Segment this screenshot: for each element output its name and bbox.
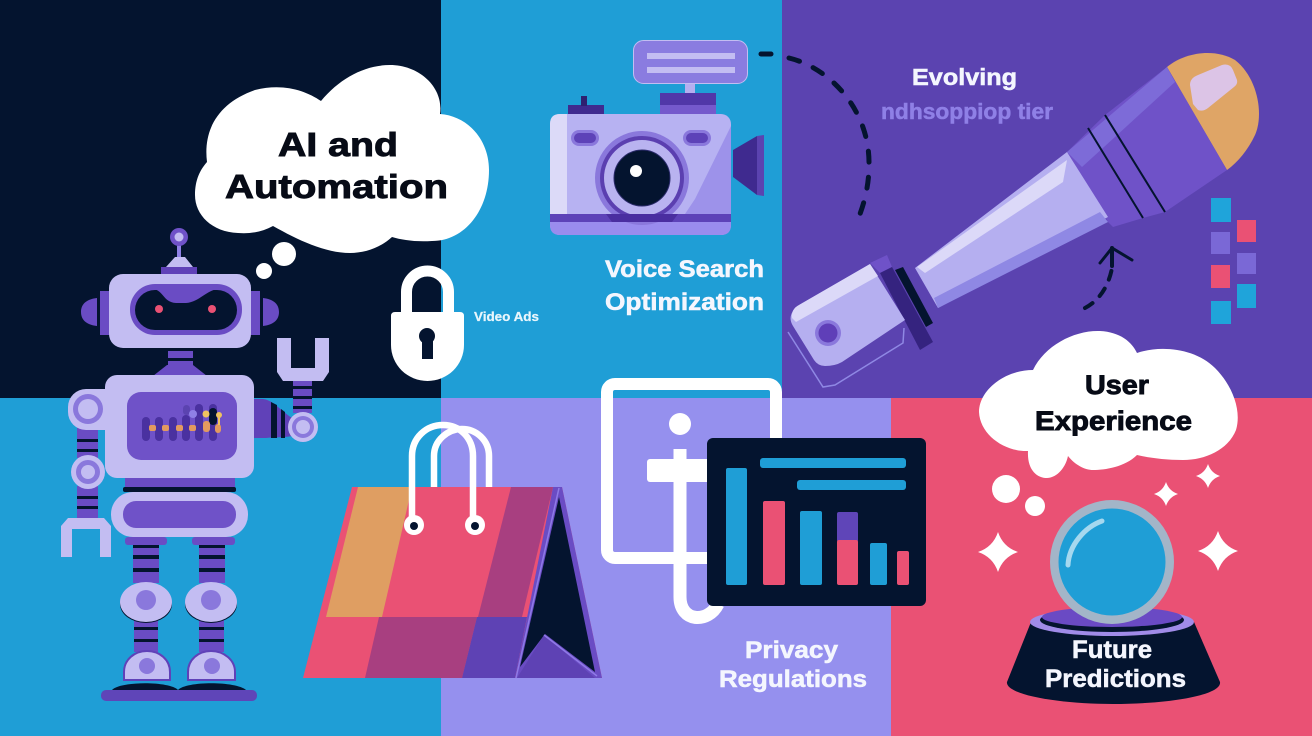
- label: Voice Search Optimization: [605, 256, 764, 316]
- robot antenna: [161, 228, 197, 274]
- icon: robot: [61, 228, 329, 701]
- robot neck: [153, 351, 207, 376]
- robot left leg: [112, 537, 178, 690]
- icon: crystal ball on pedestal: [1007, 500, 1220, 704]
- arrow: dashed curve from speech box: [761, 54, 869, 224]
- telescope orange cap: [1167, 53, 1259, 170]
- telescope front barrel: [1067, 67, 1227, 227]
- panel: pink bottom-right background: [891, 398, 1312, 736]
- crystal ball: [1050, 500, 1174, 624]
- telescope eyepiece handle: [791, 264, 905, 366]
- bag back handle: [434, 429, 489, 488]
- robot head: [81, 274, 279, 348]
- camera lens: [595, 131, 689, 225]
- callout: User Experience cloud: Experience: [1035, 406, 1192, 436]
- robot chest equalizer: [142, 404, 222, 441]
- heading: Evolving: Evolving: [912, 64, 1017, 90]
- label: Privacy Regulations: [719, 637, 867, 693]
- label: Privacy Regulations: Privacy: [745, 637, 839, 664]
- bag side gusset: [515, 487, 602, 678]
- robot base bar: [101, 690, 257, 701]
- robot right arm and gripper: [254, 338, 329, 442]
- pedestal: [1007, 607, 1220, 704]
- telescope collar bands: [870, 255, 933, 350]
- robot torso: [105, 375, 254, 537]
- label: Future Predictions: [1045, 636, 1186, 693]
- panel: blue bottom-left background: [0, 398, 441, 736]
- icon: padlock: [391, 271, 464, 381]
- icon: shopping bag: [303, 425, 602, 678]
- video cone: [733, 135, 764, 196]
- panel: navy top-left background: [0, 0, 441, 398]
- label: Voice Search Optimization: Voice Search: [605, 256, 764, 283]
- robot right leg: [178, 537, 246, 690]
- camera body: [550, 114, 731, 235]
- telescope rear outline: [788, 328, 904, 387]
- heading: Evolving: [881, 64, 1053, 124]
- label: Voice Search Optimization: Optimization: [605, 289, 764, 316]
- speech box: [634, 40, 748, 94]
- label: Future Predictions: Future: [1072, 636, 1152, 664]
- callout: User Experience cloud: [979, 331, 1238, 516]
- callout: AI and Automation cloud: AI and: [278, 126, 398, 163]
- icon: telescope: [788, 53, 1259, 387]
- icon: sparkles: [978, 464, 1238, 572]
- telescope main body: [915, 152, 1108, 308]
- flash mount and dial: [568, 93, 716, 115]
- callout: AI and Automation cloud: [195, 65, 489, 279]
- label: Privacy Regulations: Regulations: [719, 666, 867, 693]
- bag front panels: [303, 487, 602, 678]
- callout: AI and Automation cloud: Automation: [225, 168, 448, 205]
- panel: purple top-right background: [782, 0, 1312, 398]
- icon: colored squares: [1211, 198, 1256, 324]
- bar chart dashboard: [707, 438, 926, 606]
- panel: blue top-middle background: [441, 0, 782, 398]
- icon: camera with speech box: [550, 40, 764, 235]
- label: Video Ads: Video Ads: [474, 310, 539, 324]
- icon: tablet info frame: [607, 384, 776, 618]
- panel: lavender bottom-middle background: [441, 398, 892, 736]
- label: Future Predictions: Predictions: [1045, 665, 1186, 693]
- callout: User Experience cloud: User: [1085, 370, 1150, 400]
- arrow: small dashed arrow to telescope: [1085, 248, 1132, 308]
- robot left arm and gripper: [61, 389, 111, 557]
- heading: Evolving: ndhsoppiop tier: [881, 99, 1053, 124]
- bag front handle: [404, 425, 485, 535]
